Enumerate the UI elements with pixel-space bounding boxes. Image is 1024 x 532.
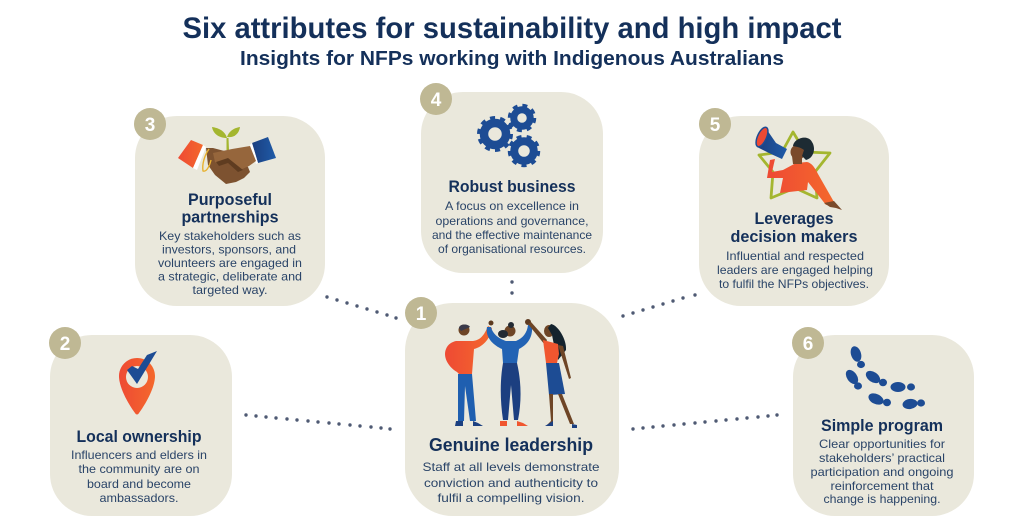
badge 1 — [405, 297, 437, 329]
heading: Purposeful — [188, 191, 272, 209]
heading: Local ownership — [76, 428, 202, 446]
heading: decision makers — [730, 228, 858, 246]
heading: Robust business — [448, 178, 576, 196]
connector dots: card 4 to card 1 — [510, 280, 514, 295]
panel: 2 local ownership — [49, 327, 232, 516]
body text: Influencers and elders in — [71, 448, 207, 462]
badge 5 — [699, 108, 731, 140]
badge 1: 1 — [416, 304, 427, 325]
body text: stakeholders’ practical — [819, 451, 945, 465]
body text: volunteers are engaged in — [158, 256, 302, 270]
badge 3: 3 — [145, 115, 155, 136]
body text: to fulfil the NFPs objectives. — [719, 277, 869, 291]
badge 2 — [49, 327, 81, 359]
badge 6: 6 — [803, 334, 813, 355]
body text: targeted way. — [192, 283, 268, 297]
body text: and the effective maintenance — [432, 228, 592, 242]
body text: of organisational resources. — [438, 242, 586, 256]
heading: Leverages — [754, 210, 834, 228]
body text: reinforcement that — [830, 479, 934, 493]
body text: A focus on excellence in — [445, 199, 579, 213]
badge 3 — [134, 108, 166, 140]
body text: Key stakeholders such as — [159, 229, 301, 243]
badge 6 — [792, 327, 824, 359]
subtitle: Insights for NFPs working with Indigenous Australians — [240, 48, 784, 70]
illustration: three people with raised joined hands — [445, 319, 577, 428]
icon: woman with megaphone in a star — [754, 126, 842, 210]
heading — [182, 191, 278, 226]
badge 5: 5 — [710, 115, 721, 136]
body text: ambassadors. — [100, 491, 178, 505]
icon: three gears — [479, 106, 538, 166]
body text: operations and governance, — [436, 214, 588, 228]
body text — [717, 249, 873, 291]
heading: Simple program — [821, 417, 943, 435]
icon: location pin with check — [119, 351, 157, 414]
body text: a strategic, deliberate and — [158, 270, 302, 284]
body text — [158, 229, 302, 297]
body text: change is happening. — [824, 492, 940, 506]
body text — [810, 437, 954, 506]
connector dots: card 6 to card 1 — [631, 413, 779, 431]
heading: partnerships — [182, 208, 278, 226]
body text: conviction and authenticity to — [424, 476, 598, 490]
body text: Influential and respected — [726, 249, 864, 263]
panel: 1 genuine leadership — [405, 297, 619, 516]
body text: fulfil a compelling vision. — [438, 491, 584, 505]
badge 2: 2 — [60, 334, 70, 355]
body text: board and become — [87, 477, 191, 491]
heading: Genuine leadership — [429, 435, 593, 455]
body text: Clear opportunities for — [819, 437, 945, 451]
panel: 3 purposeful partnerships — [134, 108, 325, 306]
body text — [432, 199, 592, 256]
icon: handshake with seedling — [178, 127, 276, 184]
connector dots: card 2 to card 1 — [244, 413, 392, 431]
connector dots: card 5 to card 1 — [621, 293, 697, 318]
body text — [422, 460, 600, 505]
badge 4 — [420, 83, 452, 115]
panel: 4 robust business — [420, 83, 603, 273]
heading — [730, 210, 858, 246]
badge 4: 4 — [431, 90, 442, 111]
panel: 5 leverages decision makers — [699, 108, 889, 306]
panel: 6 simple program — [792, 327, 974, 516]
body text — [71, 448, 207, 505]
body text: the community are on — [78, 462, 200, 476]
body text: investors, sponsors, and — [162, 242, 296, 256]
body text: Staff at all levels demonstrate — [422, 460, 600, 474]
body text: participation and ongoing — [810, 465, 954, 479]
body text: leaders are engaged helping — [717, 263, 873, 277]
title: Six attributes for sustainability and high impact — [182, 12, 842, 45]
icon: footprints — [843, 345, 925, 410]
connector dots: card 3 to card 1 — [325, 295, 398, 320]
